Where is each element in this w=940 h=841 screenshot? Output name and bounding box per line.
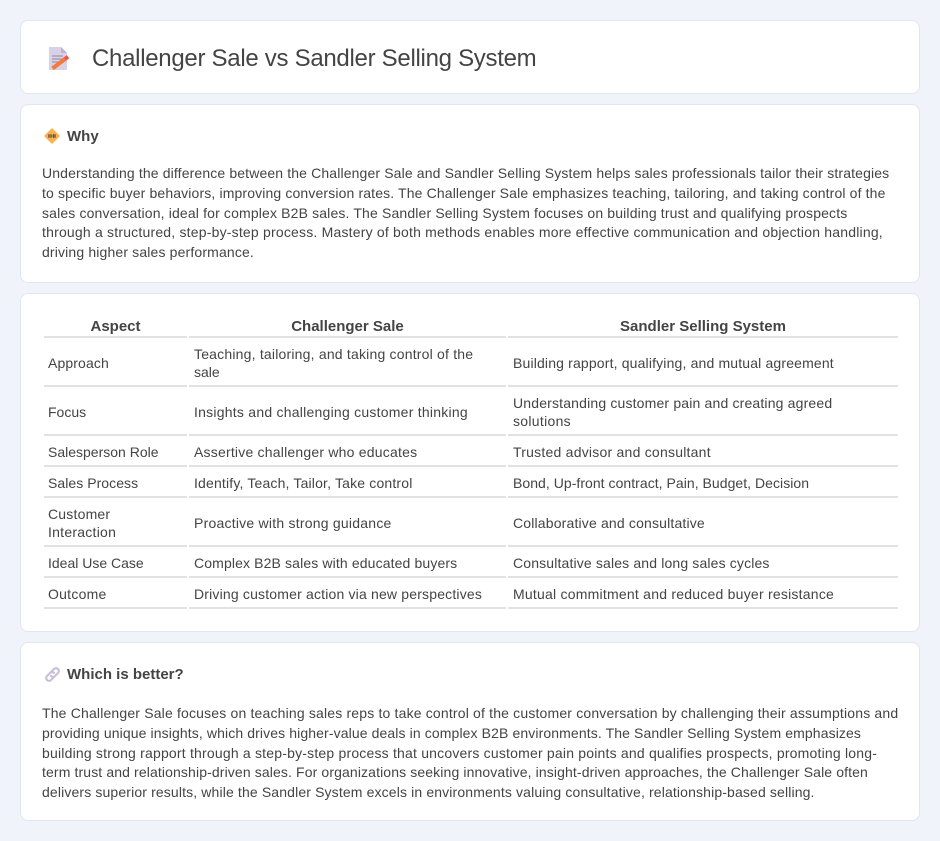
icon: diamond sign <box>44 128 60 144</box>
row: salesperson role <box>48 444 711 460</box>
row: customer interaction: Collaborative and consultative <box>513 515 705 531</box>
row: sales process: Sales Process <box>48 475 138 491</box>
text: which is better paragraph: building strong rapport through a step-by-step process that uncovers customer pain points and qualifies prospects, promoting long- <box>42 745 877 761</box>
row: ideal use case: Ideal Use Case <box>48 555 144 571</box>
text: which is better paragraph: term trust and relationship-driven sales. For organizations seeking innovative, insight-driven approaches, the Challenger Sale often <box>42 764 868 780</box>
row: sales process <box>48 475 809 491</box>
row: sales process: Bond, Up-front contract, Pain, Budget, Decision <box>513 475 809 491</box>
text: why paragraph: to specific buyer behaviors, improving conversion rates. The Challenger Sale emphasizes teaching, tailoring, and taking control of the <box>42 185 886 201</box>
table header <box>90 318 786 335</box>
row: ideal use case: Consultative sales and long sales cycles <box>513 555 770 571</box>
row: ideal use case <box>48 555 770 571</box>
panel: why <box>20 104 920 283</box>
panel: which is better <box>20 642 920 821</box>
text: why paragraph: Understanding the difference between the Challenger Sale and Sandler Selling System helps sales professionals tailor their strategies <box>42 165 889 181</box>
row: customer interaction: Proactive with strong guidance <box>194 515 392 531</box>
panel: comparison table <box>20 293 920 632</box>
row: salesperson role: Assertive challenger who educates <box>194 444 417 460</box>
row: sales process: Identify, Teach, Tailor, Take control <box>194 475 412 491</box>
row: approach <box>48 346 834 380</box>
row: approach: sale <box>194 364 220 380</box>
row: outcome: Mutual commitment and reduced buyer resistance <box>513 586 834 602</box>
row: customer interaction <box>48 506 705 540</box>
text: which is better paragraph: providing unique insights, which drives higher-value deals in complex B2B environments. The Sandler Selling System emphasizes <box>42 725 861 741</box>
row: ideal use case: Complex B2B sales with educated buyers <box>194 555 457 571</box>
title: Challenger Sale vs Sandler Selling System <box>92 45 536 72</box>
row: focus <box>48 395 832 429</box>
table header: Challenger Sale <box>291 318 404 335</box>
row: customer interaction: Interaction <box>48 524 116 540</box>
text: why paragraph: driving higher sales performance. <box>42 244 254 260</box>
row: customer interaction: Customer <box>48 506 110 522</box>
row: focus: Focus <box>48 404 86 420</box>
row: focus: Understanding customer pain and creating agreed <box>513 395 832 411</box>
icon: chain link <box>45 667 60 682</box>
row: outcome: Outcome <box>48 586 107 602</box>
row: salesperson role: Salesperson Role <box>48 444 159 460</box>
text: which is better paragraph <box>42 705 898 800</box>
heading: which is better: Which is better? <box>67 666 184 683</box>
table header: Sandler Selling System <box>620 318 786 335</box>
text: why paragraph <box>42 165 889 260</box>
row: outcome: Driving customer action via new perspectives <box>194 586 482 602</box>
row: approach: Approach <box>48 355 109 371</box>
row: focus: Insights and challenging customer thinking <box>194 404 468 420</box>
panel: title header <box>20 20 920 94</box>
row: focus: solutions <box>513 413 571 429</box>
text: which is better paragraph: The Challenger Sale focuses on teaching sales reps to take control of the customer conversation by challenging their assumptions and <box>42 705 898 721</box>
text: why paragraph: through a structured, step-by-step process. Mastery of both methods enables more effective communication and objection handling, <box>42 224 883 240</box>
row: approach: Building rapport, qualifying, and mutual agreement <box>513 355 834 371</box>
table header: Aspect <box>90 318 141 335</box>
text: which is better paragraph: delivers superior results, while the Sandler System excels in environments valuing consultative, relationship-based selling. <box>42 784 815 800</box>
row: outcome <box>48 586 834 602</box>
row: salesperson role: Trusted advisor and consultant <box>513 444 711 460</box>
icon: document with pencil <box>49 47 70 70</box>
text: why paragraph: sales conversation, ideal for complex B2B sales. The Sandler Selling System focuses on building trust and qualifying prospects <box>42 205 847 221</box>
heading: why: Why <box>67 128 99 145</box>
row: approach: Teaching, tailoring, and taking control of the <box>194 346 473 362</box>
